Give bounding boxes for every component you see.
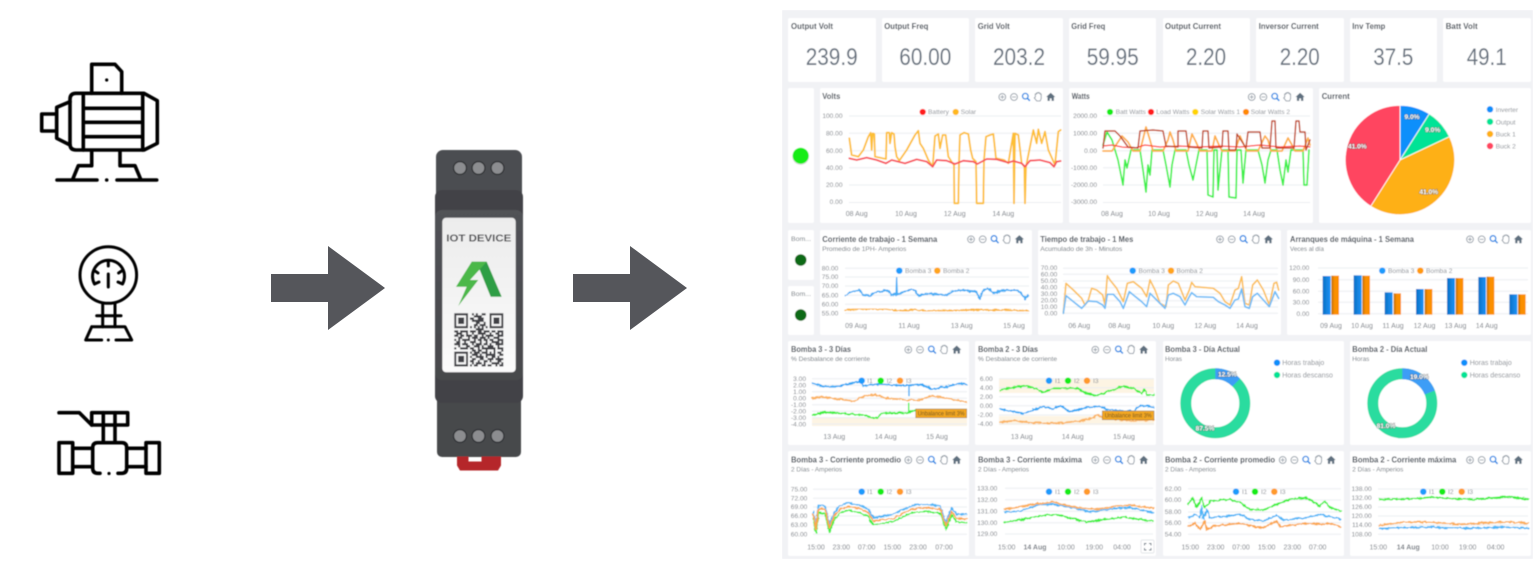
- chart: Watts: 10 Aug: [1148, 211, 1170, 218]
- chart: Bomba 2 - Corriente maxima: 120.00: [1352, 513, 1372, 520]
- chart: Bomba 3 - 3 Dias: 13 Aug: [823, 434, 845, 441]
- chart: Bomba 2 - Dia Actual donut: Horas: [1352, 356, 1370, 363]
- top screws: [454, 162, 504, 174]
- chart: Current pie: Buck 1: [1496, 132, 1516, 139]
- KPI: Output Freq: [882, 18, 969, 82]
- chart: Bomba 2 - Corriente maxima: 10:00: [1431, 544, 1449, 552]
- chart: Bomba 2 - Dia Actual donut: 19.0%: [1410, 374, 1429, 381]
- chart: Volts: 80.00: [826, 130, 843, 138]
- chart: Arranques de maquina bars: Veces al día: [1290, 246, 1324, 253]
- chart: Watts: 14 Aug: [1243, 211, 1265, 218]
- bottom screws: [454, 430, 504, 442]
- chart: Bomba 3 - Corriente maxima: 2 Días - Amperios: [978, 466, 1030, 474]
- chart: Bomba 2 - Corriente promedio: 23:00: [1284, 544, 1301, 552]
- chart: Bomba 3 - Corriente maxima: [975, 451, 1156, 556]
- chart: Bomba 2 - Corriente maxima: 114.00: [1352, 522, 1372, 529]
- chart: Bomba 2 - Corriente promedio: 54.00: [1165, 532, 1182, 538]
- chart: Watts: 0.00: [1084, 148, 1097, 155]
- chart: Bomba 3 - Corriente maxima: I1: [1055, 489, 1061, 496]
- KPI: Inversor Current: [1256, 18, 1344, 82]
- chart: Bomba 2 - Corriente promedio: 15:00: [1182, 544, 1199, 552]
- icon: pressure gauge: [80, 247, 137, 342]
- chart: Bomba 3 - Corriente maxima: Bomba 3 - Corriente máxima: [978, 454, 1082, 464]
- chart: Bomba 3 - Dia Actual donut: 87.5%: [1196, 426, 1214, 432]
- chart: Corriente de trabajo: Corriente de trabajo - 1 Semana: [822, 234, 938, 244]
- KPI: Inv Temp: Inv Temp: [1352, 21, 1385, 31]
- chart: Bomba 2 - Corriente promedio: [1163, 451, 1344, 556]
- chart: Corriente de trabajo: 15 Aug: [1003, 323, 1025, 330]
- chart: Arranques de maquina bars: Arranques de máquina - 1 Semana: [1290, 234, 1414, 244]
- chart: Bomba 3 - Corriente promedio: 23:00: [833, 544, 850, 552]
- chart: Tiempo de trabajo: 60.00: [1041, 271, 1058, 278]
- chart: Bomba 2 - Corriente maxima: 108.00: [1352, 532, 1372, 538]
- chart: Watts: -3000.00: [1071, 199, 1097, 206]
- chart: Bomba 2 - Dia Actual donut: [1350, 341, 1531, 445]
- device mid body: [435, 190, 523, 403]
- chart: Tiempo de trabajo: 50.00: [1041, 278, 1058, 285]
- KPI: Batt Volt: Batt Volt: [1446, 21, 1478, 31]
- chart: Bomba 2 - Corriente maxima: Bomba 2 - Corriente máxima: [1352, 454, 1457, 464]
- dashboard background: [782, 10, 1533, 559]
- chart: Current pie: Inverter: [1496, 107, 1519, 114]
- chart: Arranques de maquina bars: 13 Aug: [1445, 323, 1467, 330]
- KPI: Output Current: 2.20: [1186, 44, 1226, 71]
- chart: Corriente de trabajo: 70.00: [822, 283, 839, 290]
- chart: Bomba 2 - 3 Dias: Bomba 2 - 3 Días: [978, 344, 1038, 354]
- chart: Bomba 3 - 3 Dias: 3.00: [793, 376, 806, 383]
- chart: Bomba 3 - Corriente maxima: 14 Aug: [1023, 544, 1047, 552]
- chart: Bomba 2 - Corriente maxima: [1350, 451, 1531, 556]
- KPI: Output Freq: 60.00: [899, 44, 951, 71]
- chart: Bomba 2 - 3 Dias: I1: [1055, 378, 1061, 385]
- chart: Bomba 3 - 3 Dias: -2.00: [791, 409, 806, 416]
- chart: Bomba 3 - Corriente promedio: 07:00: [935, 544, 953, 552]
- chart: Corriente de trabajo: 11 Aug: [898, 323, 920, 330]
- chart: Bomba 3 - 3 Dias: Bomba 3 - 3 Días: [791, 344, 851, 354]
- chart: Bomba 2 - 3 Dias: % Desbalance de corriente: [978, 356, 1057, 363]
- chart: Tiempo de trabajo: 10.00: [1041, 304, 1058, 311]
- chart: Volts: 60.00: [826, 148, 843, 155]
- chart: Bomba 2 - 3 Dias: 2.00: [980, 394, 993, 401]
- KPI: Inv Temp: [1350, 18, 1437, 82]
- chart: Corriente de trabajo: 60.00: [822, 302, 839, 308]
- chart: Watts: -2000.00: [1071, 182, 1097, 189]
- arrow: sensors to device: [271, 246, 385, 330]
- chart: Arranques de maquina bars: 11 Aug: [1382, 323, 1404, 330]
- chart: Corriente de trabajo: Bomba 2: [943, 268, 970, 275]
- chart: Tiempo de trabajo: Acumulado de 3h - Minutos: [1040, 246, 1123, 253]
- KPI: Inv Temp: 37.5: [1373, 44, 1413, 71]
- chart: Bomba 2 - Corriente maxima: I3: [1468, 489, 1473, 496]
- KPI: Output Freq: Output Freq: [884, 21, 928, 31]
- chart: Corriente de trabajo: 75.00: [822, 274, 839, 281]
- chart: Corriente de trabajo: Promedio de 1PH- Amperios: [822, 246, 907, 253]
- chart: Bomba 2 - Corriente promedio: 23:00: [1207, 544, 1225, 552]
- chart: Tiempo de trabajo: Bomba 2: [1176, 268, 1203, 275]
- chart: Volts: 20.00: [826, 182, 843, 189]
- annotation: unbalance limit: [916, 409, 967, 418]
- chart: Bomba 3 - 3 Dias: I2: [887, 378, 893, 385]
- chart: Tiempo de trabajo: Tiempo de trabajo - 1 Mes: [1040, 234, 1134, 244]
- chart: Current pie: Buck 2: [1496, 144, 1516, 151]
- chart: Bomba 3 - 3 Dias: 2.00: [793, 382, 806, 389]
- chart: Current pie: [1319, 88, 1531, 223]
- chart: Bomba 3 - Corriente promedio: 63.00: [791, 522, 808, 529]
- chart: Arranques de maquina bars: 30.00: [1293, 300, 1310, 306]
- chart: Bomba 3 - Corriente promedio: [788, 451, 969, 556]
- chart: Arranques de maquina bars: [1287, 230, 1531, 335]
- chart: Bomba 2 - 3 Dias: 15 Aug: [1113, 434, 1135, 441]
- chart: Bomba 3 - Corriente promedio: 2 Días - Amperios: [791, 466, 843, 474]
- annotation: unbalance limit: Unbalance limit 3%: [918, 412, 965, 418]
- KPI: Batt Volt: 49.1: [1467, 44, 1507, 71]
- KPI: Inversor Current: 2.20: [1280, 44, 1320, 71]
- chart: Bomba 2 - Corriente promedio: 60.00: [1165, 497, 1182, 504]
- chart: Bomba 3 - Corriente maxima: 04:00: [1113, 544, 1131, 552]
- chart: Bomba 3 - 3 Dias: [788, 341, 969, 445]
- chart: Bomba 2 - Dia Actual donut: 81.0%: [1377, 423, 1395, 430]
- chart: Bomba 2 - Corriente promedio: 62.00: [1165, 486, 1182, 493]
- KPI: Output Volt: 239.9: [806, 44, 858, 71]
- chart: Volts: 0.00: [830, 199, 843, 206]
- chart: Watts: 08 Aug: [1101, 211, 1123, 218]
- chart: Tiempo de trabajo: 20.00: [1041, 298, 1058, 305]
- chart: Bomba 2 - Corriente promedio: 07:00: [1309, 544, 1327, 552]
- status card: Bomba 2 LED: [788, 286, 814, 335]
- chart: Corriente de trabajo: 55.00: [822, 310, 839, 318]
- chart: Tiempo de trabajo: 40.00: [1041, 285, 1058, 292]
- chart: Arranques de maquina bars: 90.00: [1293, 277, 1310, 284]
- panel: monitoring dashboard: [782, 10, 1533, 559]
- chart: Bomba 3 - Corriente maxima: I2: [1074, 489, 1080, 496]
- chart: Volts: Volts: [822, 91, 841, 101]
- chart: Watts: [1069, 88, 1313, 223]
- chart: Bomba 2 - 3 Dias: I3: [1093, 378, 1099, 385]
- chart: Bomba 2 - Corriente maxima: 138.00: [1352, 486, 1372, 493]
- chart: Bomba 2 - Corriente promedio: 56.00: [1165, 520, 1182, 527]
- chart: Bomba 2 - Corriente promedio: Bomba 2 - Corriente promedio: [1165, 454, 1275, 464]
- chart: Bomba 3 - Corriente maxima: 19:00: [1086, 544, 1103, 552]
- chart: Bomba 2 - 3 Dias: 4.00: [980, 385, 993, 392]
- chart: Tiempo de trabajo: 12 Aug: [1194, 323, 1216, 330]
- chart: Bomba 3 - Corriente promedio: 72.00: [791, 496, 808, 502]
- chart: Watts: Load Watts: [1156, 109, 1190, 116]
- annotation: unbalance limit: Unbalance limit 3%: [1105, 414, 1152, 420]
- chart: Watts: Watts: [1072, 91, 1090, 101]
- chart: Bomba 3 - Corriente promedio: 66.00: [791, 513, 808, 520]
- chart: Current pie: Current: [1322, 91, 1350, 101]
- panel: sensed equipment icons: [42, 64, 159, 475]
- chart: Volts: [820, 88, 1063, 223]
- device label: [442, 218, 516, 372]
- status card: Bomba 3 LED: Bom...: [791, 236, 811, 243]
- chart: Bomba 2 - Corriente maxima: 2 Días - Amperios: [1352, 466, 1404, 474]
- chart: Tiempo de trabajo: 30.00: [1041, 291, 1058, 298]
- chart: Bomba 3 - 3 Dias: 1.00: [793, 389, 806, 396]
- chart: Corriente de trabajo: 13 Aug: [951, 323, 973, 330]
- chart: Tiempo de trabajo: [1038, 230, 1281, 335]
- icon: valve: [59, 413, 159, 475]
- chart: Bomba 3 - Corriente maxima: 129.00: [977, 531, 998, 538]
- chart: Bomba 2 - Corriente maxima: 126.00: [1352, 504, 1372, 511]
- chart: Arranques de maquina bars: 120.00: [1289, 265, 1310, 272]
- chart: Bomba 3 - Dia Actual donut: 12.5%: [1218, 372, 1237, 378]
- chart: Bomba 3 - Corriente promedio: I3: [906, 489, 912, 496]
- chart: Corriente de trabajo: 80.00: [822, 266, 839, 272]
- chart: Tiempo de trabajo: 10 Aug: [1152, 323, 1174, 330]
- chart: Arranques de maquina bars: 10 Aug: [1351, 323, 1373, 330]
- chart: Volts: 14 Aug: [992, 211, 1014, 218]
- chart: Bomba 3 - 3 Dias: -1.00: [791, 402, 806, 409]
- chart: Bomba 2 - 3 Dias: 13 Aug: [1011, 434, 1033, 441]
- KPI: Output Current: Output Current: [1165, 21, 1221, 31]
- chart: Bomba 3 - Corriente promedio: 15:00: [884, 544, 901, 552]
- chart: Bomba 3 - 3 Dias: -3.00: [791, 415, 806, 422]
- chart: Bomba 2 - Corriente maxima: 14 Aug: [1397, 544, 1420, 552]
- device top terminal block: [436, 150, 522, 210]
- KPI: Output Volt: Output Volt: [791, 21, 833, 31]
- chart: Current pie: 9.0%: [1425, 127, 1440, 134]
- chart: Volts: 12 Aug: [944, 211, 966, 218]
- QR code: [454, 314, 503, 365]
- chart: Current pie: 41.0%: [1419, 189, 1438, 196]
- chart: Bomba 3 - Corriente promedio: 60.00: [791, 532, 808, 538]
- chart: Watts: Solar Watts 2: [1251, 109, 1290, 116]
- icon: electric motor: [42, 64, 157, 182]
- chart: Volts: 100.00: [822, 113, 843, 120]
- chart: Bomba 3 - Corriente promedio: 75.00: [791, 486, 808, 494]
- chart: Bomba 3 - Corriente maxima: 132.00: [977, 497, 998, 504]
- chart: Bomba 2 - 3 Dias: [975, 341, 1156, 445]
- chart: Watts: 1000.00: [1073, 130, 1097, 138]
- chart: Bomba 2 - Corriente promedio: I2: [1261, 489, 1267, 496]
- chart: Tiempo de trabajo: 08 Aug: [1108, 323, 1130, 330]
- KPI: Batt Volt: [1443, 18, 1531, 82]
- chart: Bomba 3 - Corriente maxima: 131.00: [977, 508, 998, 516]
- chart: Corriente de trabajo: 65.00: [822, 292, 839, 300]
- chart: Bomba 3 - Corriente promedio: 23:00: [909, 544, 927, 552]
- red DIN clip: [457, 456, 501, 470]
- chart: Tiempo de trabajo: 14 Aug: [1236, 323, 1258, 330]
- device label text: IOT DEVICE: [446, 232, 511, 244]
- chart: Bomba 3 - Corriente maxima: 133.00: [977, 486, 998, 492]
- chart: Bomba 2 - Corriente promedio: 07:00: [1232, 544, 1250, 552]
- chart: Bomba 2 - Corriente promedio: 2 Días - Amperios: [1165, 466, 1217, 474]
- chart: Volts: 08 Aug: [846, 211, 868, 218]
- chart: Bomba 3 - 3 Dias: % Desbalance de corriente: [791, 356, 870, 363]
- chart: Bomba 3 - Dia Actual donut: Bomba 3 - Día Actual: [1165, 344, 1240, 354]
- chart: Bomba 3 - Dia Actual donut: Horas trabajo: [1282, 360, 1324, 367]
- chart: Bomba 2 - 3 Dias: 6.00: [980, 376, 993, 383]
- device bottom terminal block: [437, 390, 521, 457]
- chart: Corriente de trabajo: Bomba 3: [905, 268, 932, 275]
- chart: Watts: 2000.00: [1073, 113, 1097, 120]
- chart: Bomba 2 - 3 Dias: -2.00: [978, 412, 993, 419]
- chart: Bomba 3 - Corriente maxima: 10:00: [1057, 544, 1075, 552]
- chart: Current pie: 41.0%: [1348, 144, 1367, 150]
- chart: Bomba 3 - 3 Dias: I1: [867, 378, 873, 385]
- KPI: Grid Freq: [1069, 18, 1156, 82]
- chart: Tiempo de trabajo: 0.00: [1044, 310, 1058, 317]
- chart: Bomba 3 - 3 Dias: 15 Aug: [926, 434, 948, 441]
- KPI: Inversor Current: Inversor Current: [1259, 21, 1319, 31]
- chart: Bomba 3 - Corriente maxima: I3: [1093, 489, 1099, 496]
- chart: Bomba 3 - Corriente promedio: 07:00: [858, 544, 876, 552]
- chart: Bomba 2 - Corriente promedio: I1: [1242, 489, 1248, 496]
- annotation: unbalance limit: [1102, 411, 1154, 420]
- chart: Bomba 2 - Corriente maxima: 04:00: [1487, 544, 1505, 552]
- chart: Watts: Solar Watts 1: [1201, 109, 1240, 116]
- chart: Bomba 2 - Dia Actual donut: Horas trabajo: [1470, 360, 1512, 367]
- chart: Bomba 2 - Corriente maxima: I1: [1429, 489, 1435, 496]
- logo: green A bolt: [456, 262, 502, 306]
- chart: Tiempo de trabajo: 70.00: [1041, 265, 1058, 272]
- chart: Bomba 2 - Corriente maxima: 15:00: [1370, 544, 1387, 552]
- chart: Bomba 2 - Corriente maxima: 19:00: [1459, 544, 1477, 552]
- chart: Arranques de maquina bars: 12 Aug: [1414, 323, 1436, 330]
- chart: Volts: 40.00: [826, 165, 843, 172]
- chart: Bomba 3 - Corriente promedio: Bomba 3 - Corriente promedio: [791, 454, 901, 464]
- chart: Tiempo de trabajo: Bomba 3: [1138, 268, 1165, 275]
- device front: [435, 210, 523, 380]
- chart: Bomba 3 - Dia Actual donut: Horas: [1165, 356, 1183, 363]
- chart: Arranques de maquina bars: Bomba 2: [1426, 268, 1453, 275]
- chart: Bomba 2 - 3 Dias: 0.00: [980, 403, 993, 410]
- chart: Arranques de maquina bars: 09 Aug: [1320, 323, 1342, 330]
- KPI: Grid Volt: 203.2: [993, 44, 1045, 71]
- KPI: Grid Freq: 59.95: [1087, 44, 1139, 71]
- chart: Corriente de trabajo: 09 Aug: [845, 323, 867, 330]
- chart: Bomba 3 - Dia Actual donut: Horas descanso: [1282, 372, 1333, 380]
- chart: Arranques de maquina bars: Bomba 3: [1388, 268, 1415, 275]
- chart: Bomba 2 - Corriente maxima: I2: [1448, 489, 1454, 496]
- chart: Bomba 3 - 3 Dias: I3: [906, 378, 912, 385]
- chart: Tiempo de trabajo: 06 Aug: [1068, 323, 1090, 330]
- chart: Bomba 2 - Corriente promedio: 15:00: [1258, 544, 1276, 552]
- chart: Volts: Solar: [961, 109, 977, 116]
- chart: Bomba 2 - Corriente promedio: I3: [1280, 489, 1286, 496]
- KPI: Output Current: [1163, 18, 1250, 82]
- arrow: device to dashboard: [573, 246, 687, 330]
- chart: Volts: Battery: [928, 109, 950, 116]
- chart: Bomba 2 - 3 Dias: -4.00: [978, 421, 993, 428]
- chart: Current pie: Output: [1496, 119, 1516, 126]
- chart: Watts: Batt Watts: [1116, 109, 1147, 116]
- chart: Bomba 3 - Corriente maxima: 15:00: [998, 544, 1016, 552]
- status card: Bomba 3 LED: [788, 230, 814, 280]
- icon: fullscreen: [1141, 540, 1154, 553]
- chart: Volts: 10 Aug: [895, 211, 917, 218]
- chart: Bomba 3 - Corriente promedio: 69.00: [791, 504, 808, 511]
- chart: Bomba 3 - Corriente promedio: 15:00: [807, 544, 825, 552]
- chart: Watts: -1000.00: [1071, 165, 1097, 172]
- chart: Corriente de trabajo: [820, 230, 1032, 335]
- chart: Current pie: 9.0%: [1404, 114, 1420, 121]
- KPI: Grid Volt: Grid Volt: [978, 21, 1010, 31]
- chart: Bomba 2 - 3 Dias: 14 Aug: [1062, 434, 1084, 441]
- chart: Bomba 2 - Dia Actual donut: Bomba 2 - Día Actual: [1352, 344, 1427, 354]
- chart: Arranques de maquina bars: 60.00: [1293, 288, 1310, 296]
- chart: Bomba 3 - Corriente maxima: 130.00: [977, 520, 998, 527]
- chart: Bomba 3 - Dia Actual donut: [1163, 341, 1344, 445]
- chart: Bomba 3 - Corriente promedio: I2: [887, 489, 893, 496]
- chart: Bomba 2 - Corriente maxima: 132.00: [1352, 495, 1372, 502]
- panel: IoT DIN rail device: [435, 150, 523, 470]
- chart: Arranques de maquina bars: 14 Aug: [1476, 323, 1498, 330]
- chart: Bomba 3 - 3 Dias: 0.00: [793, 396, 806, 403]
- chart: Arranques de maquina bars: 0.00: [1296, 311, 1310, 318]
- status card: green LED: [788, 88, 814, 223]
- KPI: Grid Volt: [975, 18, 1063, 82]
- status card: Bomba 2 LED: Bom...: [791, 291, 811, 298]
- chart: Bomba 2 - Dia Actual donut: Horas descanso: [1470, 372, 1520, 380]
- chart: Bomba 3 - Corriente promedio: I1: [867, 489, 873, 496]
- chart: Watts: 12 Aug: [1196, 211, 1218, 218]
- chart: Bomba 2 - 3 Dias: I2: [1074, 378, 1080, 385]
- KPI: Output Volt: [788, 18, 876, 82]
- KPI: Grid Freq: Grid Freq: [1071, 21, 1105, 31]
- chart: Bomba 3 - 3 Dias: -4.00: [791, 422, 806, 428]
- chart: Bomba 2 - Corriente promedio: 58.00: [1165, 509, 1182, 516]
- chart: Bomba 3 - 3 Dias: 14 Aug: [875, 434, 897, 441]
